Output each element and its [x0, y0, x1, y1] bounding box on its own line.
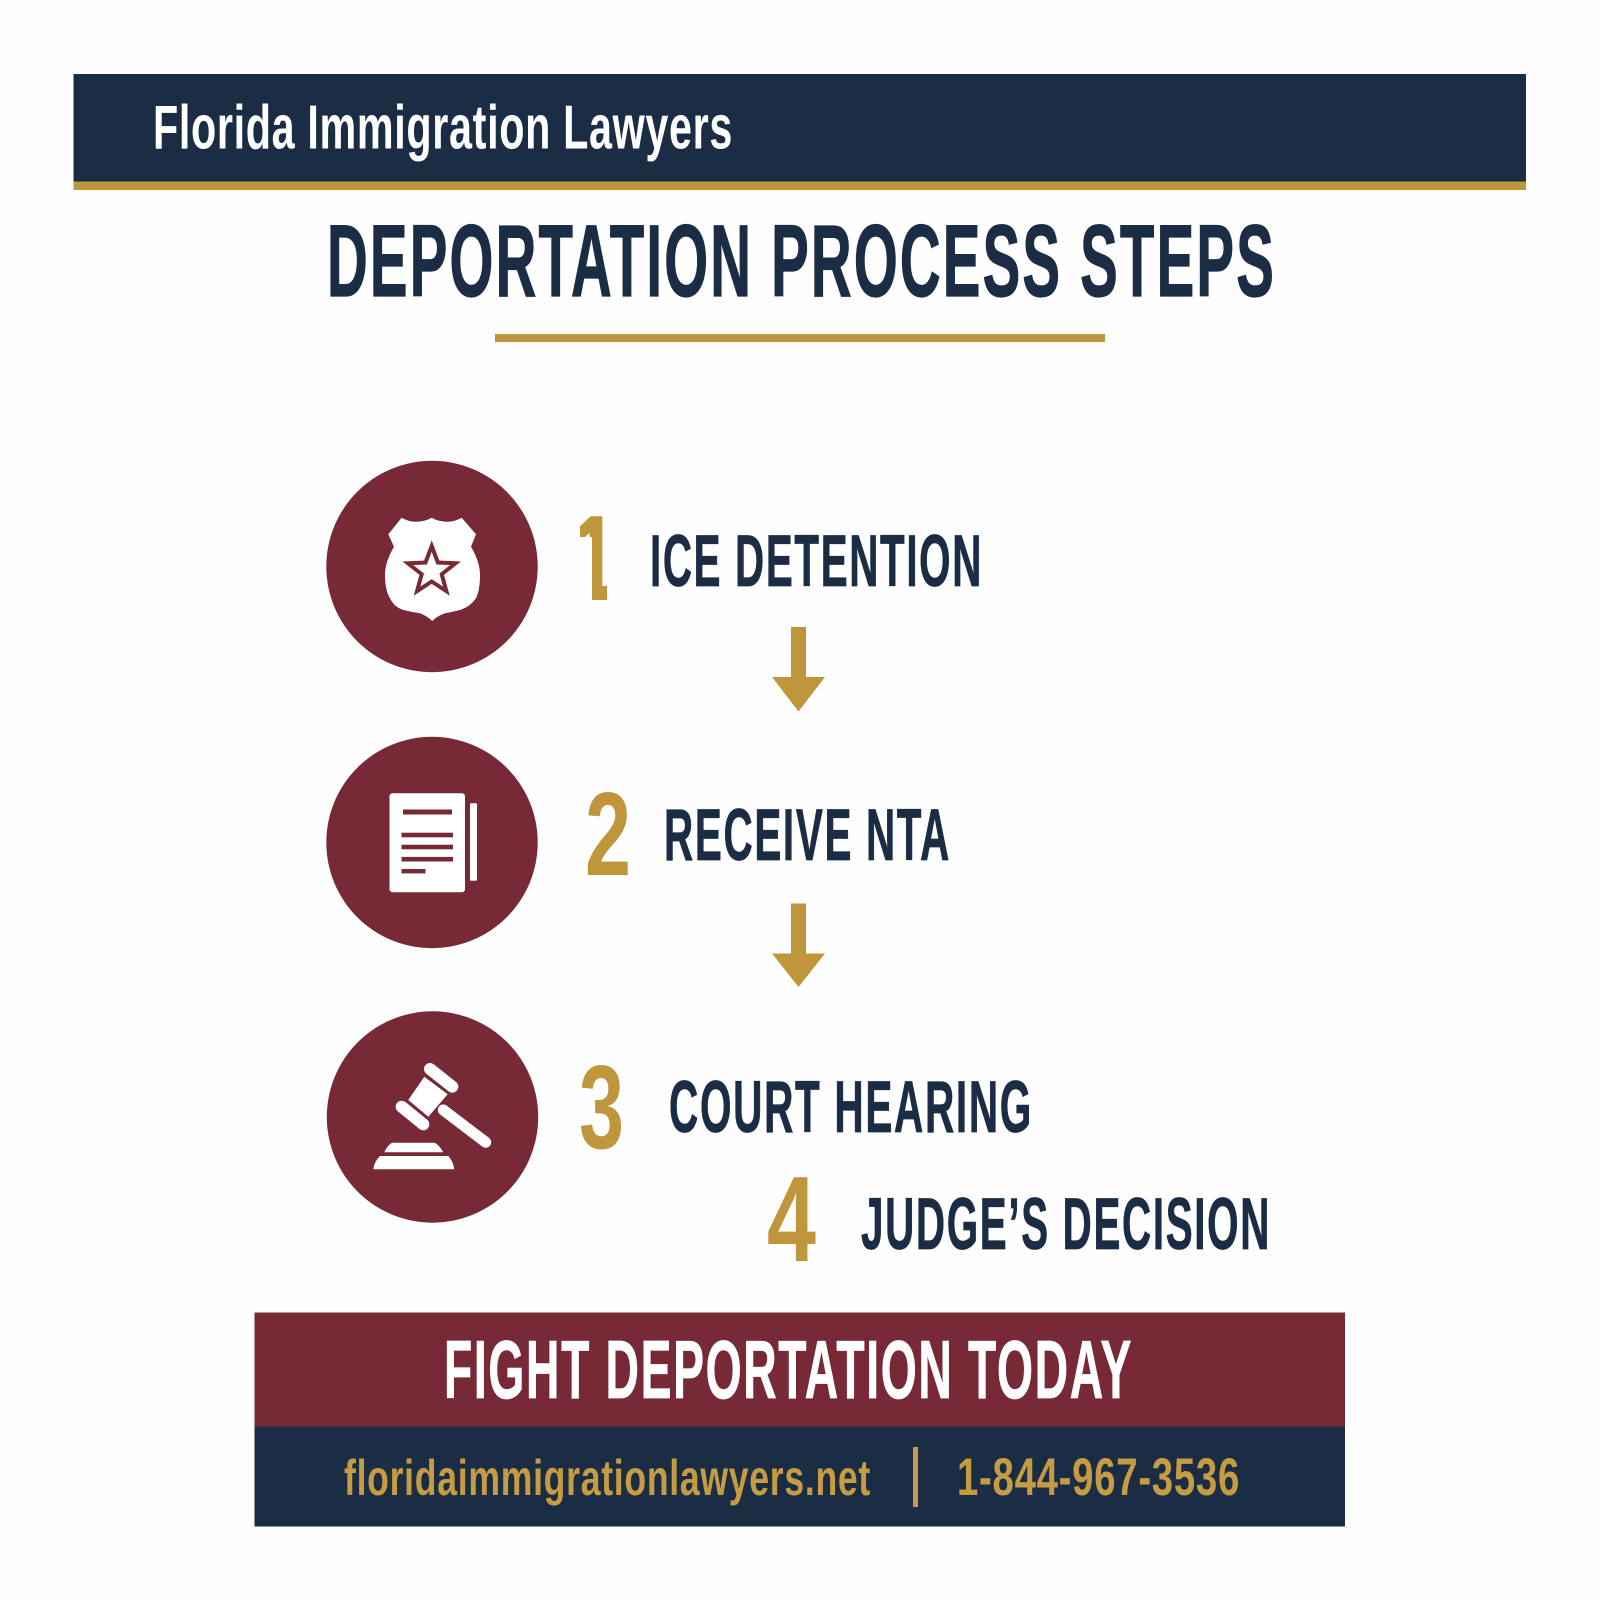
step label: RECEIVE NTA	[664, 795, 951, 876]
website: floridaimmigrationlawyers.net	[344, 1450, 871, 1506]
step 4: judge's decision	[767, 1151, 1271, 1287]
icon: gavel	[327, 1011, 538, 1223]
arrow: step 2 to 3	[772, 904, 825, 987]
phone number: 1-844-967-3536	[957, 1448, 1240, 1507]
step 1: ICE detention	[326, 461, 983, 672]
icon: police badge	[326, 461, 538, 672]
step number 1: 1	[571, 492, 617, 625]
step label: JUDGE’S DECISION	[861, 1184, 1271, 1265]
header firm name: Florida Immigration Lawyers	[153, 94, 733, 162]
contact bar	[254, 1426, 1345, 1526]
step 3: court hearing	[327, 1011, 1033, 1223]
step 2: receive NTA	[326, 737, 951, 948]
step label: ICE DETENTION	[650, 521, 983, 602]
step number 3: 3	[579, 1041, 624, 1174]
call to action banner	[254, 1312, 1345, 1426]
contact divider	[913, 1447, 918, 1507]
step number 2: 2	[585, 768, 631, 901]
step label: COURT HEARING	[669, 1067, 1033, 1148]
icon: document	[326, 737, 538, 948]
header banner	[74, 74, 1526, 190]
arrow: step 1 to 2	[772, 627, 825, 712]
title underline	[495, 334, 1105, 342]
step number 4: 4	[767, 1151, 816, 1287]
